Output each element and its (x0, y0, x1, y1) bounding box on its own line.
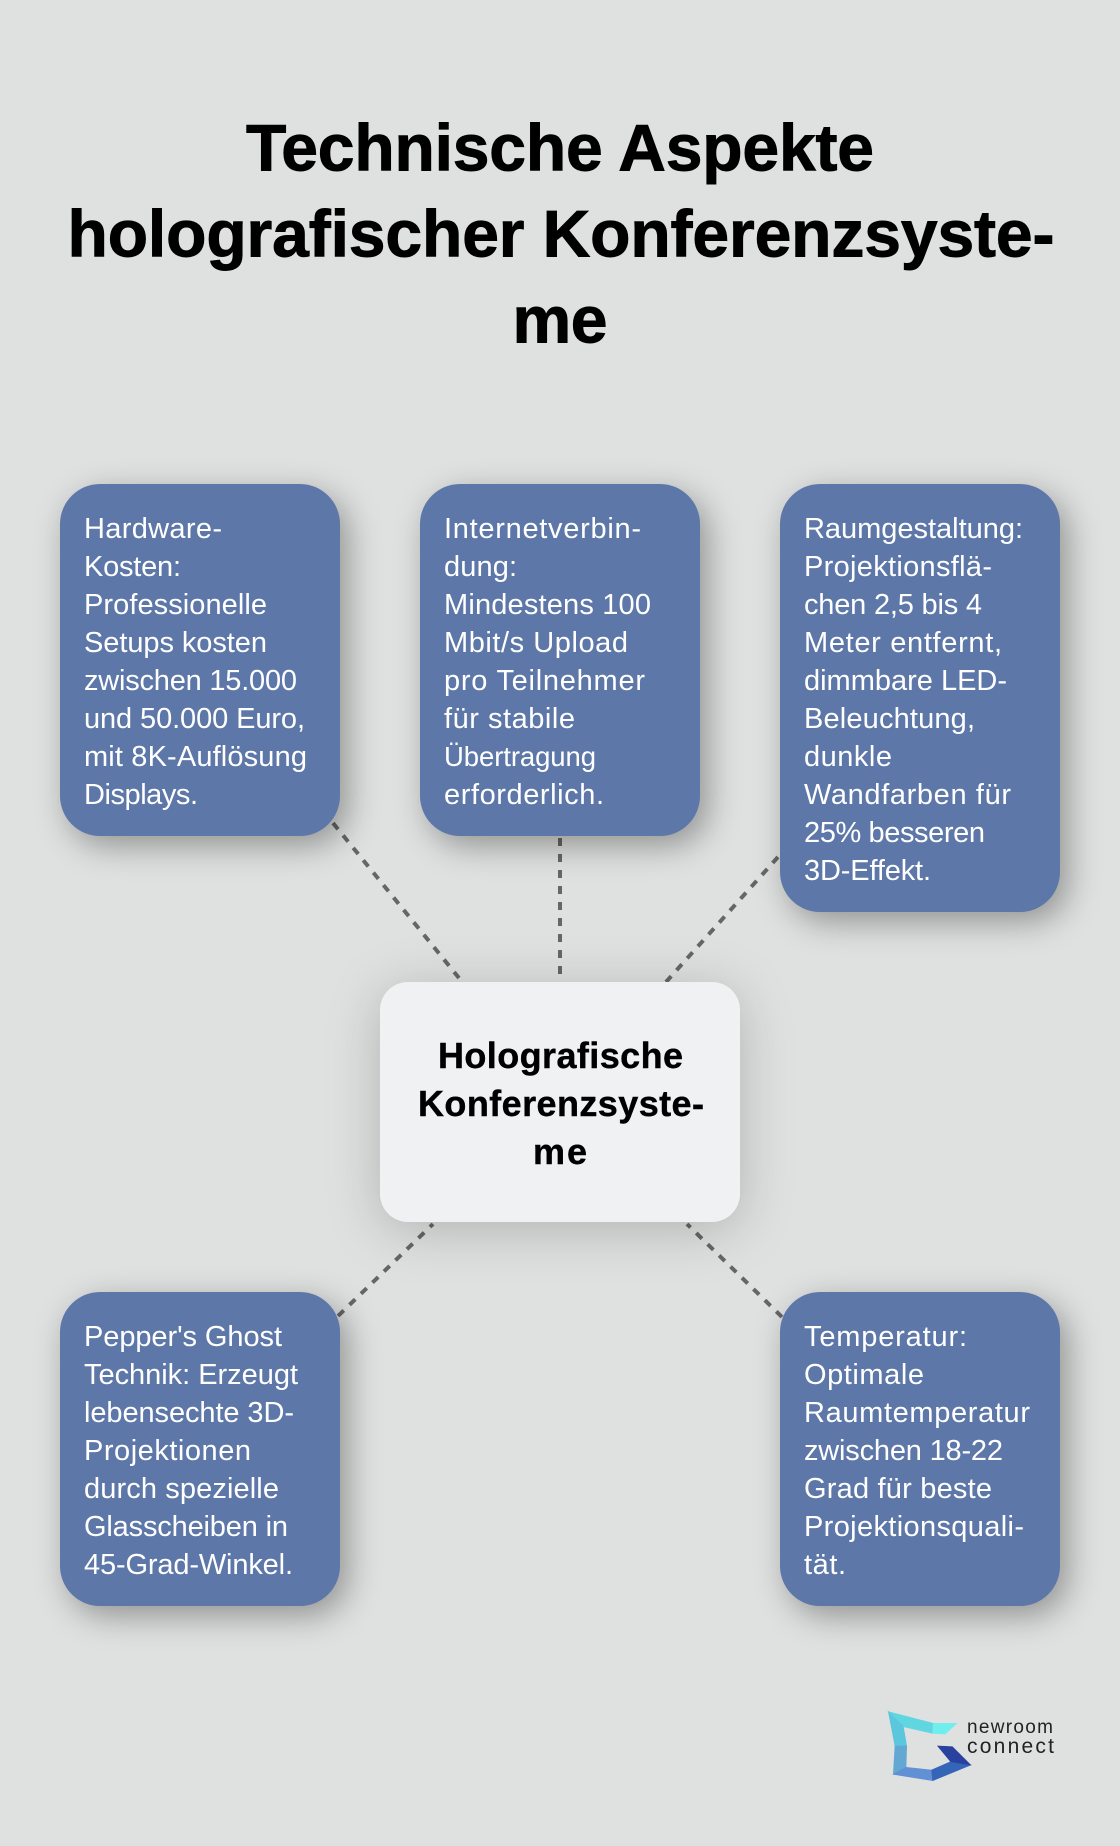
panel: temperature: Grad für beste (804, 1473, 992, 1505)
connector: internet to center (558, 838, 562, 976)
panel: room design: Beleuchtung, (804, 703, 975, 735)
panel: temperature: zwischen 18-22 (804, 1435, 1003, 1467)
panel: hardware costs: Kosten: (84, 551, 181, 583)
panel: pepper's ghost technique: 45-Grad-Winkel. (84, 1549, 293, 1581)
panel: pepper's ghost technique (60, 1292, 340, 1606)
panel: hardware costs: zwischen 15.000 (84, 665, 297, 697)
logo: newroom connect: newroom (967, 1717, 1053, 1738)
panel: temperature: tät. (804, 1549, 846, 1581)
panel: room design: Wandfarben für (804, 779, 1011, 811)
title: Technische Aspekte (246, 110, 874, 184)
panel: hardware costs: Professionelle (84, 589, 267, 621)
panel: pepper's ghost technique: durch spezielle (84, 1473, 279, 1505)
panel: room design: dimmbare LED- (804, 665, 1007, 697)
connector: temperature to center (687, 1224, 782, 1317)
panel: internet connection: Mbit/s Upload (444, 627, 628, 659)
panel: temperature: Raumtemperatur (804, 1397, 1030, 1429)
panel: internet connection: Übertragung (444, 741, 596, 772)
panel: room design (780, 484, 1060, 912)
panel: hardware costs (60, 484, 340, 836)
panel: hardware costs: mit 8K-Auflösung (84, 741, 307, 773)
panel: room design: 3D-Effekt. (804, 855, 931, 887)
panel: temperature: Temperatur: (804, 1321, 967, 1353)
title: holografischer Konferenzsyste- (68, 196, 1054, 270)
connector: room to center (666, 857, 778, 982)
panel: pepper's ghost technique: Projektionen (84, 1435, 251, 1467)
panel: pepper's ghost technique: lebensechte 3D- (84, 1397, 294, 1429)
panel: room design: dunkle (804, 741, 892, 773)
panel: temperature: Optimale (804, 1359, 924, 1391)
panel: internet connection (420, 484, 700, 836)
panel: internet connection: dung: (444, 551, 517, 583)
panel: center topic: Konferenzsyste- (418, 1083, 704, 1124)
panel: internet connection: pro Teilnehmer (444, 665, 645, 697)
panel: center topic (380, 982, 740, 1222)
panel: room design: Projektionsflä- (804, 551, 992, 583)
panel: temperature: Projektionsquali- (804, 1511, 1024, 1543)
connector: hardware to center (333, 823, 459, 978)
panel: hardware costs: Displays. (84, 779, 198, 811)
panel: room design: chen 2,5 bis 4 (804, 589, 982, 621)
panel: internet connection: erforderlich. (444, 779, 604, 811)
panel: room design: Meter entfernt, (804, 627, 1002, 659)
panel: hardware costs: Hardware- (84, 513, 222, 545)
panel: internet connection: Internetverbin- (444, 513, 641, 545)
panel: center topic: me (533, 1131, 587, 1172)
panel: temperature (780, 1292, 1060, 1606)
panel: center topic: Holografische (438, 1035, 683, 1076)
panel: pepper's ghost technique: Pepper's Ghost (84, 1321, 282, 1353)
panel: hardware costs: und 50.000 Euro, (84, 703, 305, 735)
connector: pepper's ghost to center (338, 1224, 433, 1316)
title: me (512, 282, 608, 356)
panel: room design: 25% besseren (804, 817, 985, 849)
panel: hardware costs: Setups kosten (84, 627, 267, 659)
panel: internet connection: für stabile (444, 703, 575, 735)
logo: newroom connect: connect (967, 1735, 1054, 1758)
panel: internet connection: Mindestens 100 (444, 589, 651, 621)
panel: pepper's ghost technique: Technik: Erzeugt (84, 1359, 298, 1391)
panel: pepper's ghost technique: Glasscheiben in (84, 1511, 288, 1543)
logo: newroom connect (888, 1712, 1054, 1781)
icon: logo mark (888, 1712, 971, 1781)
panel: room design: Raumgestaltung: (804, 513, 1023, 545)
title (68, 110, 1054, 356)
